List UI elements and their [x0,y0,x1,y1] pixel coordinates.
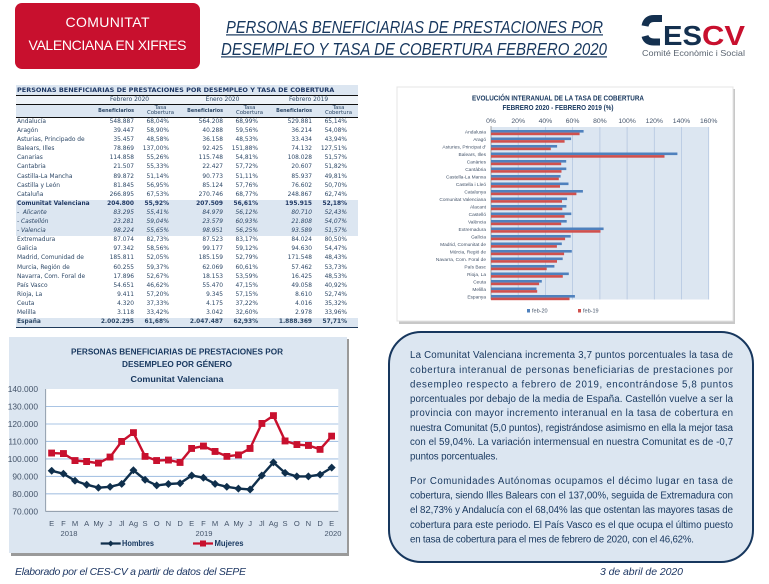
table body: 59,56% [236,128,258,134]
table body: 52,79% [236,255,258,261]
table body: 48,58% [147,137,169,143]
table body: 54,81% [236,155,258,161]
y axis labels: 110.000 [8,436,38,446]
table body: 3.118 [117,310,134,316]
x axis labels: Jl [259,519,265,528]
table body: Febrero 2019 [289,97,328,103]
paragraph 2: Por Comunidades Autónomas ocupamos el décimo lugar en tasa de [410,476,733,487]
table body: 17.896 [113,274,134,280]
table body: Comunitat Valenciana [17,201,90,207]
category labels: Navarra, Com. Foral de [436,257,486,263]
x axis labels: A [224,519,230,528]
percent axis: 100% [618,118,636,125]
table body: 151,88% [232,146,258,152]
category labels: Espanya [467,294,486,300]
table body: Madrid, Comunidad de [17,255,84,261]
line: Mujeres [52,416,332,463]
table body: Murcia, Región de [17,264,70,270]
category labels: Alacant [470,204,487,210]
paragraph 1: con el 59,04%. La variación intermensual en nuestra Comunitat es de -0,7 [410,437,733,448]
paragraph 1: nuestra Comunitat (5,0 puntos), registrándose asimismo en ella la mejor tasa [410,423,734,434]
table body: 54,07% [325,219,347,225]
table body: 56,25% [236,228,258,234]
x axis labels: S [143,519,148,528]
table body: España [17,319,41,325]
panel: line chart by gender [8,337,349,556]
table body: 65,14% [325,119,347,125]
percent axis: 20% [511,118,525,125]
table body: 115.748 [199,155,223,161]
table body: Beneficiarios [187,108,223,114]
category labels: País Basc [464,264,487,270]
percent axis: 80% [593,118,607,125]
table body: 207.509 [196,201,223,207]
table body: 59,12% [236,246,258,252]
table title: PERSONAS BENEFICIARIAS DE PRESTACIONES POR DESEMPLEO Y TASA DE COBERTURA [17,86,334,94]
table body: 55,33% [147,164,169,170]
table body: País Vasco [17,283,48,289]
table body: 83.295 [113,210,134,216]
y axis labels: 140.000 [8,384,38,394]
table body: 60.255 [113,264,134,270]
table body: 55,65% [147,228,169,234]
table body: Beneficiarios [276,108,312,114]
table body: 3.042 [206,310,223,316]
table body: Castilla-La Mancha [17,174,73,180]
table body: 85.937 [291,174,312,180]
table body: 40,92% [325,283,347,289]
x axis labels: E [189,519,194,528]
table body: 48,53% [236,137,258,143]
category labels: Castella-La Manxa [446,174,486,180]
table body: 46,62% [147,283,169,289]
x axis labels: E [329,519,334,528]
table body: 82,73% [147,237,169,243]
category labels: Melilla [472,287,486,293]
table body: 53,73% [325,264,347,270]
table body: 2.002.295 [101,319,134,325]
paragraph 2: cobertura, siendo Illes Balears con el 137,00%, seguida de Extremadura con [410,490,733,502]
table body: 58,90% [147,128,169,134]
table body: 195.915 [285,201,312,207]
x axis labels: J [248,519,252,528]
table body: 59,04% [147,219,169,225]
x axis labels: J [108,519,112,528]
paragraph 1 [410,350,734,462]
table body: 99.177 [202,246,223,252]
table body: Cobertura [147,110,174,116]
table body: 58,56% [147,246,169,252]
category labels: Canàries [467,160,487,166]
bar chart title: FEBRERO 2020 - FEBRERO 2019 (%) [502,103,614,112]
table body: 52,18% [322,201,347,207]
plot area [491,126,709,300]
table body: 37,22% [236,301,258,307]
paragraph 2: en tasa de cobertura para el mes de febrero de 2020, con el 46,62%. [410,534,694,546]
table body: 43,94% [325,137,347,143]
category labels: Extremadura [459,227,486,233]
table body: 51,57% [325,155,347,161]
table body: 4.175 [206,301,223,307]
logo: CES CV: Comité Econòmic i Social [642,48,745,58]
y axis labels [8,384,38,516]
table body: 54.651 [113,283,134,289]
badge: Comunitat Valenciana en xifres: VALENCIANA EN XIFRES [28,37,186,53]
table body: 39.447 [113,128,134,134]
table body: Asturias, Principado de [17,137,85,143]
y axis labels: 120.000 [8,419,38,429]
bar chart legend [527,309,599,315]
table body: Tasa [155,105,166,111]
table body: 92.425 [202,146,223,152]
footer: source: Elaborado por el CES-CV a partir de datos del SEPE [15,566,247,578]
table body: 22.427 [202,164,223,170]
table body: 23.579 [202,219,223,225]
table body: 60,61% [236,264,258,270]
table body: Cobertura [325,110,352,116]
x axis labels: My [233,519,244,528]
plot area [46,389,338,511]
table body: 54,08% [325,128,347,134]
percent axis: 140% [673,118,690,125]
category labels: Aragó [473,137,486,143]
table body: 57,15% [236,292,258,298]
category labels: Múrcia, Regió de [450,250,486,256]
table body: 137,00% [143,146,169,152]
table body: 62,93% [233,319,258,325]
table body: Extremadura [17,237,55,243]
y axis labels: 100.000 [8,454,38,464]
table body: 56,12% [236,210,258,216]
table body: 40.288 [202,128,223,134]
table body: 85.124 [202,183,223,189]
table body: 89.872 [113,174,134,180]
x axis labels: 2019 [196,529,212,538]
bar chart legend: feb-19 [583,309,599,315]
table body: 9.345 [206,292,223,298]
table body: 4.016 [295,301,312,307]
table body: 4.320 [117,301,134,307]
table body: 171.548 [288,255,312,261]
table body: 127,51% [321,146,347,152]
paragraph 1: La Comunitat Valenciana incrementa 3,7 puntos porcentuales la tasa de [410,350,733,361]
y axis labels: 90.000 [12,471,38,481]
table body: 97.342 [113,246,134,252]
percent axis: 160% [700,118,717,125]
table body: 62,74% [325,192,347,198]
bar chart title [472,94,645,112]
panel: bar chart coverage rate [397,87,735,324]
table body: 114.858 [110,155,134,161]
table body: 33,42% [147,310,169,316]
percent axis: 40% [539,118,552,125]
table body: Tasa [333,105,344,111]
data table [16,85,358,328]
x axis labels: Jl [119,519,125,528]
table body: 23.281 [113,219,134,225]
table body: - Valencia [17,228,46,234]
table body: 80.710 [291,210,312,216]
x axis labels: A [84,519,90,528]
category labels: Balears, Illes [459,152,487,158]
table body: 37,33% [147,301,169,307]
table body: 2.047.487 [190,319,223,325]
table body: Melilla [17,310,36,316]
line chart title: DESEMPLEO POR GÉNERO [122,359,232,369]
percent axis [486,118,717,125]
category labels: Comunitat Valenciana [439,197,486,203]
table body: 21.808 [291,219,312,225]
category labels: Cantàbria [465,167,486,173]
table body: 33.434 [291,137,312,143]
paragraph 2: el 82,73% y Andalucía con el 68,04% las que ostentan las mayores tasas de [410,505,733,516]
logo: CES CV [642,18,745,58]
table body: 62.069 [202,264,223,270]
table body: 54,47% [325,246,347,252]
table body: 81.845 [113,183,134,189]
table body: 108.028 [288,155,312,161]
table body: 52,67% [147,274,169,280]
y axis labels: 130.000 [8,402,38,412]
table body: 52,05% [147,255,169,261]
table body: 49.058 [291,283,312,289]
table body: 1.888.369 [279,319,312,325]
table body: Navarra, Com. Foral de [17,274,85,280]
table body: 98.224 [113,228,134,234]
table body: 2.978 [295,310,312,316]
table body: 270.746 [199,192,223,198]
table body [16,96,358,328]
category labels: València [468,220,486,226]
x axis labels: M [72,519,78,528]
table body: 48,43% [325,255,347,261]
table body: Cataluña [17,192,43,198]
category labels: Castelló [469,212,486,218]
table body: 68,99% [236,119,258,125]
table body: 564.208 [199,119,223,125]
x axis labels: F [201,519,206,528]
x axis labels: N [306,519,311,528]
table body: 57,72% [236,164,258,170]
table body: 35.457 [113,137,134,143]
table body: 55.470 [202,283,223,289]
category labels: Castella i Lleó [456,182,486,188]
table body: 18.153 [202,274,223,280]
table body: - Alicante [17,210,47,216]
paragraph 2 [410,476,733,546]
table body: 55,41% [147,210,169,216]
line: Hombres [52,462,332,490]
table body: 57,20% [147,292,169,298]
table body: 57,71% [322,319,347,325]
line chart legend [101,539,244,548]
logo: CES CV: ES [663,20,702,51]
table body: 68,04% [147,119,169,125]
table body: 51,57% [325,228,347,234]
line chart legend: Hombres [122,539,155,548]
table body: 94.630 [291,246,312,252]
table body: 93.589 [291,228,312,234]
panel: commentary text [389,332,753,562]
table body: 185.811 [110,255,134,261]
category labels: Galícia [471,234,486,240]
table body: 67,53% [147,192,169,198]
category labels: Madrid, Comunitat de [440,242,486,248]
table body: 185.159 [199,255,223,261]
table body: 36.158 [202,137,223,143]
table body: 55,26% [147,155,169,161]
table title [16,85,358,96]
paragraph 1: desempleo respecto a febrero de 2019, encontrándose 5,8 puntos [410,380,733,390]
table body: 68,77% [236,192,258,198]
badge: Comunitat Valenciana en xifres: COMUNITAT [66,14,150,30]
table body: 90.773 [202,174,223,180]
table body: 78.869 [113,146,134,152]
x axis labels: F [61,519,66,528]
x axis labels: N [166,519,171,528]
category labels [436,130,487,300]
percent axis: 60% [566,118,579,125]
table body: 204.800 [107,201,134,207]
bars feb-20 [491,130,677,298]
table body: 87.074 [113,237,134,243]
badge: Comunitat Valenciana en xifres [15,3,200,69]
x axis labels: O [154,519,160,528]
table body: 60,93% [236,219,258,225]
x axis labels: D [177,519,183,528]
table body: 21.507 [113,164,134,170]
table body: 16.425 [291,274,312,280]
title: DESEMPLEO Y TASA DE COBERTURA FEBRERO 2020 [221,39,607,59]
table body: 49,81% [325,174,347,180]
table body: - Castellón [17,219,48,225]
x axis labels: S [283,519,288,528]
x axis labels: 2020 [325,529,341,538]
table body: 52,43% [325,210,347,216]
x axis labels [49,519,341,538]
table body: 529.881 [288,119,312,125]
line chart legend: Mujeres [214,539,244,548]
table body: Balears, Illes [17,146,54,152]
table body: 548.887 [110,119,134,125]
line chart title: Comunitat Valenciana [130,374,224,384]
y axis labels: 70.000 [12,506,38,516]
line chart title: PERSONAS BENEFICIARIAS DE PRESTACIONES POR [71,346,284,356]
title [221,17,607,59]
line chart title [71,346,284,384]
category labels: Catalunya [464,190,486,196]
table body: 51,14% [147,174,169,180]
table body: 76.602 [291,183,312,189]
table body: 74.132 [291,146,312,152]
table body: Enero 2020 [206,97,239,103]
table body: Galicia [17,246,37,252]
x axis labels: E [49,519,54,528]
footer: date: 3 de abril de 2020 [600,566,683,578]
table body: 84.024 [291,237,312,243]
category labels: Rioja, La [467,272,486,278]
table body: Tasa [244,105,255,111]
table body: Rioja, La [17,292,42,298]
table body: 51,11% [236,174,258,180]
table body: 248.867 [288,192,312,198]
table body: Cantabria [17,164,46,170]
table body: 83,17% [236,237,258,243]
table body: 56,95% [147,183,169,189]
category labels: Andalusia [465,130,486,136]
table body: 8.610 [295,292,312,298]
table body: 56,61% [233,201,258,207]
title: PERSONAS BENEFICIARIAS DE PRESTACIONES POR [226,17,603,37]
table body: 57.462 [291,264,312,270]
table body: 98.951 [202,228,223,234]
table body: 87.523 [202,237,223,243]
paragraph 1: provincia con mayor incremento interanual en la tasa de cobertura en [410,408,733,419]
x axis labels: Ag [269,519,278,528]
table body: Cobertura [236,110,263,116]
table body: Ceuta [17,301,34,307]
x axis labels: D [317,519,323,528]
table body: Febrero 2020 [110,97,149,103]
x axis labels: Ag [129,519,138,528]
paragraph 1: puntos porcentuales. [410,452,498,462]
table body: 84.979 [202,210,223,216]
table body: 52,74% [325,292,347,298]
table body: 80,50% [325,237,347,243]
x axis labels: M [212,519,218,528]
percent axis: 120% [646,118,663,125]
table body: 47,15% [236,283,258,289]
bar chart title: EVOLUCIÓN INTERANUAL DE LA TASA DE COBERTURA [472,94,645,102]
table body: Andalucía [17,119,46,125]
table body: Canarias [17,155,43,161]
table body: 35,32% [325,301,347,307]
percent axis: 0% [486,118,496,125]
paragraph 1: cobertura interanual de personas beneficiarias de prestaciones por [410,365,734,376]
category labels: Ceuta [473,280,486,286]
logo: CES CV: CV [702,20,745,51]
x axis labels: 2018 [61,529,77,538]
category labels: Asturies, Principat d' [442,144,486,150]
table body: Beneficiarios [98,108,134,114]
paragraph 1: porcentuales por debajo de la media de España. Castellón vuelve a ser la [410,394,734,405]
table body: 32,60% [236,310,258,316]
table body: 48,53% [325,274,347,280]
table body: 61,68% [144,319,169,325]
table body: Aragón [17,128,38,134]
table body: 55,92% [144,201,169,207]
table body: 266.895 [110,192,134,198]
table body: 36.214 [291,128,312,134]
table body: 50,70% [325,183,347,189]
table body: 9.411 [117,292,134,298]
table body: 57,76% [236,183,258,189]
table body: 59,37% [147,264,169,270]
table body: Castilla y León [17,183,60,189]
bars feb-19 [491,133,664,300]
table body: 20.607 [291,164,312,170]
table body: 53,59% [236,274,258,280]
paragraph 2: cobertura para este periodo. El País Vasco es el que ocupa el último puesto [410,520,733,531]
x axis labels: My [93,519,104,528]
bar chart legend: feb-20 [532,309,548,315]
y axis labels: 80.000 [12,489,38,499]
x axis labels: O [294,519,300,528]
table body: 33,96% [325,310,347,316]
table body: 51,82% [325,164,347,170]
